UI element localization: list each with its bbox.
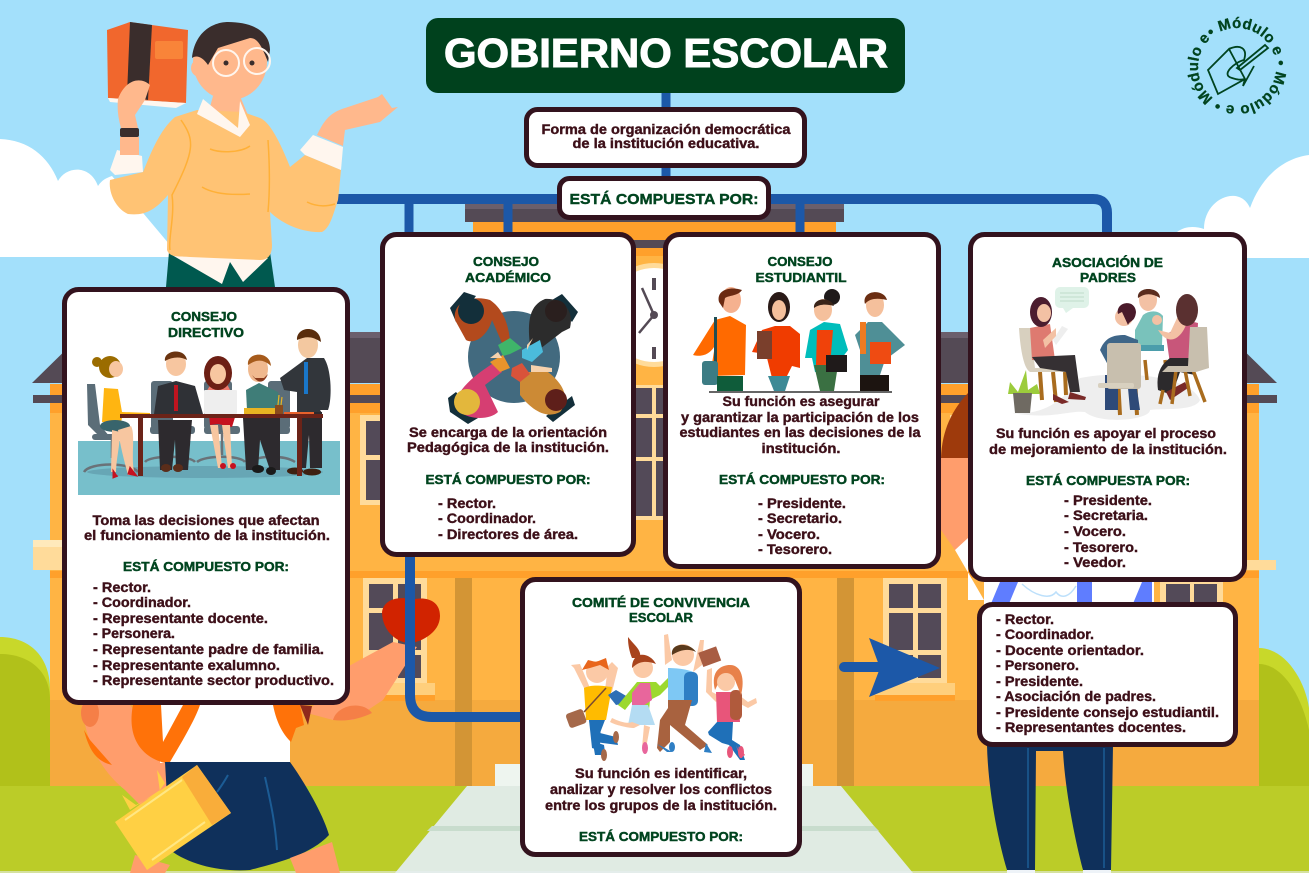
list: miembros asociación de padres: - Tesorero. [1064, 540, 1138, 555]
heading: consejo directivo [168, 309, 244, 340]
list: miembros asociación de padres: - Secretaria. [1064, 508, 1148, 523]
subheading: está compuesto por: ESTÁ COMPUESTO POR: [123, 559, 289, 574]
panel: consejo académico [382, 234, 634, 554]
text: función comité: Su función es identificar, [575, 766, 747, 781]
list: miembros consejo académico: - Rector. [438, 496, 496, 511]
list: miembros asociación de padres: - Vocero. [1064, 524, 1126, 539]
text: función consejo directivo [84, 513, 330, 543]
heading: comité de convivencia [572, 595, 750, 625]
background: ground, path and shrubs [0, 637, 1309, 873]
title [426, 18, 905, 93]
heading: consejo estudiantil: ESTUDIANTIL [756, 270, 846, 285]
list: miembros consejo directivo [93, 580, 334, 688]
heading: asociación de padres: PADRES [1080, 270, 1136, 285]
illustration: parents meeting [1008, 287, 1209, 420]
figure: student girl with briefcase [81, 598, 440, 873]
panel: miembros comité: - Asociación de padres. [996, 689, 1156, 704]
panel: miembros comité: - Docente orientador. [996, 643, 1144, 658]
text: función asociación de padres: Su función es apoyar el proceso [996, 426, 1216, 441]
subheading: está compuesto por: ESTÁ COMPUESTO POR: [579, 829, 743, 844]
list: miembros consejo académico: - Directores de área. [438, 527, 578, 542]
list: miembros consejo estudiantil: - Vocero. [758, 527, 820, 542]
text: función consejo estudiantil: Su función es asegurar [722, 394, 880, 409]
panel: miembros comité: - Representantes docentes. [996, 720, 1186, 735]
text: función consejo directivo: el funcionamiento de la institución. [84, 528, 330, 543]
list: miembros consejo directivo: - Representante sector productivo. [93, 673, 334, 688]
text: función consejo estudiantil: estudiantes en las decisiones de la [680, 425, 921, 440]
panel: comité de convivencia escolar [522, 580, 800, 854]
illustration: board meeting [78, 329, 340, 495]
text: función consejo académico: Pedagógica de la institución. [407, 440, 609, 455]
list: miembros asociación de padres: - Veedor. [1064, 555, 1126, 570]
list: miembros consejo directivo: - Representante exalumno. [93, 658, 280, 673]
label: está compuesta por [560, 178, 768, 218]
panel: miembros comité: - Presidente. [996, 674, 1083, 689]
heading: consejo académico: ACADÉMICO [465, 270, 551, 285]
text: función consejo estudiantil: institución. [762, 441, 840, 456]
text: función comité: entre los grupos de la institución. [545, 798, 777, 813]
panel: miembros comité: - Coordinador. [996, 627, 1094, 642]
list: miembros consejo estudiantil: - Tesorero. [758, 542, 832, 557]
heading: consejo estudiantil [756, 254, 846, 285]
connectors [337, 93, 1107, 717]
panel: asociación de padres [970, 234, 1244, 580]
heading: comité de convivencia: ESCOLAR [629, 610, 693, 625]
panel: miembros comité [980, 604, 1236, 744]
label: está compuesta por: ESTÁ COMPUESTA POR: [570, 191, 758, 208]
list: miembros consejo directivo: - Rector. [93, 580, 151, 595]
heading: comité de convivencia: COMITÉ DE CONVIVENCIA [572, 595, 750, 610]
text: función consejo estudiantil [680, 394, 921, 456]
list: miembros consejo académico: - Coordinador. [438, 511, 536, 526]
text: función comité: analizar y resolver los conflictos [550, 782, 772, 797]
text: función consejo académico [407, 425, 609, 455]
heading: consejo académico [465, 254, 551, 285]
definition box: de la institución educativa. [572, 136, 760, 151]
list: miembros consejo directivo: - Representante docente. [93, 611, 268, 626]
text: función asociación de padres [989, 426, 1227, 457]
background: school building [32, 204, 1277, 786]
heading: asociación de padres [1052, 255, 1163, 285]
illustration: round table puzzle [448, 292, 578, 424]
text: función consejo directivo: Toma las decisiones que afectan [92, 513, 320, 528]
subheading: está compuesto por: ESTÁ COMPUESTO POR: [719, 472, 885, 487]
panel: miembros comité: - Personero. [996, 658, 1079, 673]
illustration: four students [693, 287, 905, 393]
subheading: está compuesta por: ESTÁ COMPUESTA POR: [1026, 473, 1190, 488]
logo: Módulo e: • Módulo e • Módulo e • Módulo e [1188, 16, 1286, 114]
heading: asociación de padres: ASOCIACIÓN DE [1052, 255, 1163, 270]
title: GOBIERNO ESCOLAR [444, 30, 888, 76]
background: clock [602, 263, 706, 367]
heading: consejo directivo: DIRECTIVO [168, 325, 244, 340]
subheading: está compuesto por: ESTÁ COMPUESTO POR: [426, 472, 590, 487]
list: miembros asociación de padres [1064, 493, 1152, 570]
heading: consejo directivo: CONSEJO [171, 309, 237, 324]
heading: consejo estudiantil: CONSEJO [768, 254, 832, 269]
panel: consejo directivo [64, 290, 348, 702]
panel: consejo estudiantil [666, 234, 938, 566]
text: función asociación de padres: de mejoramiento de la institución. [989, 442, 1227, 457]
figure: student boy behind cards [941, 393, 1154, 873]
list: miembros consejo directivo: - Personera. [93, 626, 175, 641]
panel: miembros comité: - Rector. [996, 612, 1054, 627]
list: miembros consejo estudiantil: - Presidente. [758, 496, 846, 511]
list: miembros consejo estudiantil: - Secretario. [758, 511, 842, 526]
figure: teacher holding a book [107, 22, 398, 287]
text: función consejo académico: Se encarga de la orientación [409, 425, 607, 440]
text: función consejo estudiantil: y garantizar la participación de los [681, 410, 919, 425]
list: miembros consejo estudiantil [758, 496, 846, 557]
list: miembros consejo directivo: - Coordinador. [93, 595, 191, 610]
arrow [844, 638, 940, 697]
illustration: jumping students [565, 634, 757, 761]
panel: miembros comité: - Presidente consejo estudiantil. [996, 705, 1219, 720]
definition box: Forma de organización democrática [542, 122, 791, 137]
heading: consejo académico: CONSEJO [473, 254, 539, 269]
list: miembros asociación de padres: - Presidente. [1064, 493, 1152, 508]
definition box [526, 110, 804, 166]
list: miembros consejo directivo: - Representante padre de familia. [93, 642, 324, 657]
list: miembros consejo académico [438, 496, 578, 542]
text: función comité [545, 766, 777, 813]
